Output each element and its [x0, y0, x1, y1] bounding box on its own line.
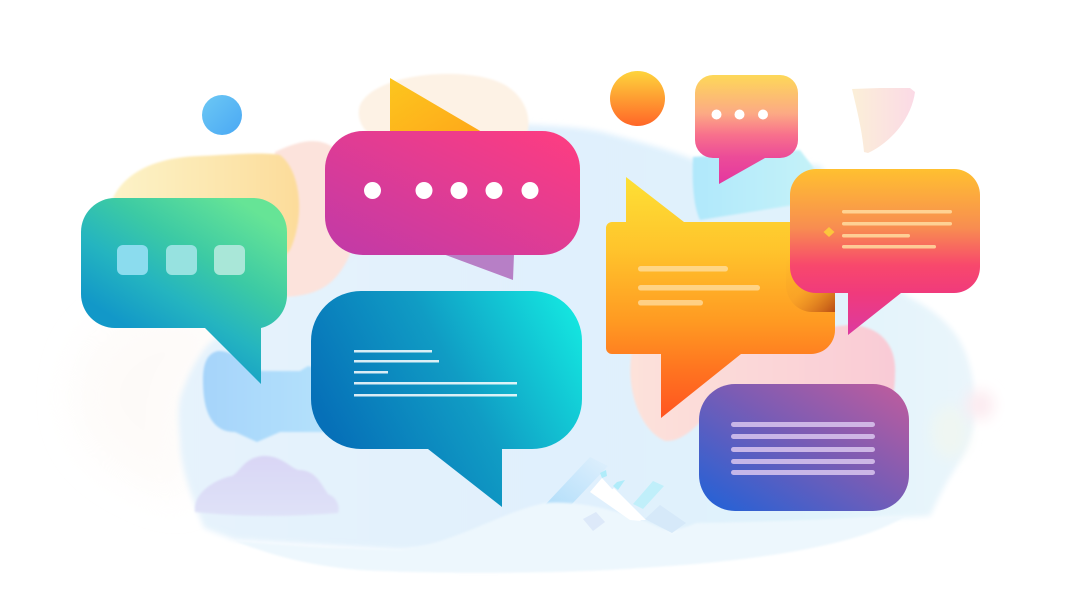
background blob: faint pink right [966, 390, 994, 420]
decoration: white peak [583, 478, 686, 533]
bubble body and tail: coral [695, 75, 798, 184]
bubble body: pink [325, 131, 580, 255]
decoration: crystal stripes [545, 457, 664, 509]
dots [712, 110, 768, 120]
background blob: light blue under teal bubble [203, 351, 330, 442]
background blob: soft yellow [112, 153, 299, 262]
bubble body: purple [699, 384, 909, 511]
background wash: pale blue cloud [179, 123, 975, 550]
dots [364, 182, 538, 199]
text lines [638, 266, 760, 306]
background cloud: lavender [195, 456, 339, 516]
background wash: faint peach left [75, 300, 240, 500]
speech bubble: sunset with text lines [790, 169, 980, 335]
decoration: orange circle [610, 71, 665, 126]
speech bubble: pink with dots [325, 131, 580, 280]
bubble body and tails: orange [606, 177, 835, 418]
bubble tail: purple [443, 254, 514, 280]
background blob: pink behind orange bubble [630, 325, 895, 441]
speech bubble: orange with text lines [606, 177, 835, 418]
text lines [731, 422, 875, 475]
decoration: yellow triangle behind pink bubble [390, 78, 482, 134]
decoration: blue circle [202, 95, 242, 135]
background blob: peach behind pink bubble [359, 74, 528, 140]
squares [117, 245, 245, 275]
bubble shadow [786, 260, 835, 312]
bubble body and tail: blue [311, 291, 582, 507]
speech bubble: blue with text lines [311, 291, 582, 507]
speech bubble: small coral with dots [695, 75, 798, 184]
decoration: pale triangle shard [852, 88, 915, 153]
background blob: soft peach left [270, 141, 350, 297]
background blob: light blue under small bubble [693, 150, 825, 220]
text lines [842, 210, 952, 248]
bubble body and tail: teal [81, 198, 287, 384]
bubble body and tail: sunset [790, 169, 980, 335]
diamond marker [824, 227, 834, 237]
background blob: faint green right [932, 406, 968, 458]
speech bubble: teal with squares [81, 198, 287, 384]
background ground: pale hill [235, 503, 905, 573]
speech bubble: purple with text lines [699, 384, 909, 511]
text lines [354, 350, 517, 396]
